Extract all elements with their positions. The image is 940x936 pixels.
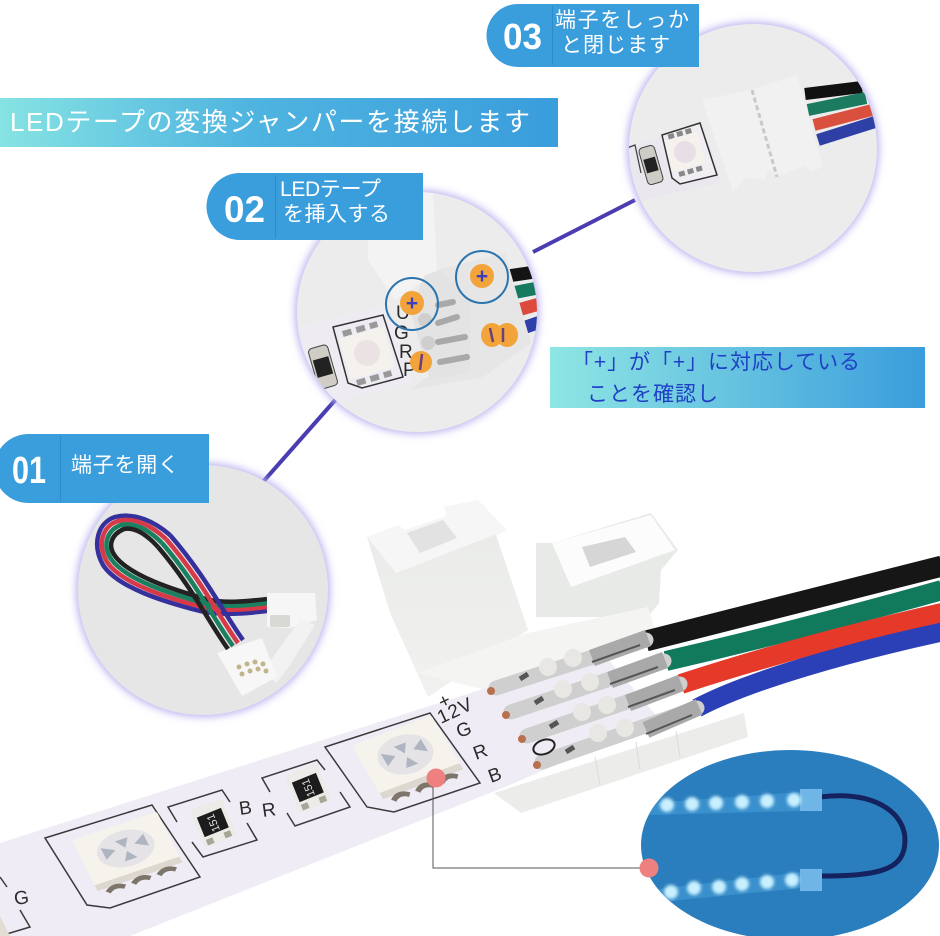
LED chip (351, 716, 466, 804)
clip contacts (438, 302, 467, 362)
LED chip left (72, 812, 185, 895)
photo: LED tape strip (0, 650, 660, 936)
LED outline (333, 315, 403, 388)
photo: lit blue strips ellipse (641, 750, 939, 936)
resistor chips (190, 763, 331, 848)
left partial outline (627, 145, 641, 173)
pad letters: P (403, 360, 416, 381)
pointer dot on LED (426, 768, 446, 788)
connector lower clamp (494, 713, 748, 813)
tape pad labels: 12V (434, 694, 476, 729)
callout: check polarity: 「+」が「+」に対応している (572, 351, 860, 374)
tape pad labels (13, 690, 505, 910)
jumper wire (820, 796, 905, 876)
callout: check polarity (550, 347, 925, 408)
tape pad labels: B (238, 797, 253, 820)
lit strip bottom (658, 872, 800, 901)
step label 02: LEDテープ (280, 178, 381, 201)
pad letters: U (396, 303, 410, 324)
tape pad labels: + (435, 690, 454, 714)
connectors (800, 789, 822, 811)
round pads (539, 649, 634, 742)
resistor (308, 344, 338, 390)
title banner: LEDテープの変換ジャンパーを接続します (10, 107, 530, 137)
lit strip top (650, 792, 802, 815)
tape pad labels: G (13, 887, 30, 910)
pad letters: R (399, 342, 413, 363)
plus marker on tape (386, 278, 438, 330)
plus marker on tape: + (406, 292, 418, 315)
G pad partial LED (0, 916, 10, 936)
connector lines (262, 200, 635, 483)
pad letters: G (394, 323, 409, 344)
step label 03: 端子をしっか (555, 9, 689, 32)
photo: open connector (367, 500, 748, 813)
metal contacts (487, 638, 699, 769)
callout: check polarity: ことを確認し (587, 383, 718, 406)
step label 02: 02 (224, 189, 265, 230)
tape pad labels: G (454, 718, 475, 743)
circle photo: step 01 (76, 463, 330, 717)
footprint outlines (0, 713, 480, 936)
open clip connectors (267, 593, 317, 628)
connector hinge band (417, 607, 655, 690)
resistor (638, 145, 664, 185)
step label 01: 端子を開く (71, 454, 179, 477)
LED outline (662, 123, 717, 184)
closed clip (702, 75, 823, 192)
step label 03: と閉じます (561, 34, 670, 57)
descending strands (158, 535, 243, 649)
LED chip (663, 129, 707, 176)
step label 01: 01 (12, 450, 46, 492)
step label 02: を挿入する (283, 203, 390, 226)
top lights (660, 793, 801, 812)
clip body (508, 269, 528, 334)
circle photo: step 02 (295, 190, 552, 434)
pointer line (433, 785, 642, 868)
pointer dot on ellipse (640, 858, 658, 878)
looped jumper wire (97, 516, 267, 649)
wires: black green red blue (646, 566, 940, 708)
plus marker on clip: + (476, 265, 488, 288)
gold contacts grid (236, 660, 268, 676)
loop and tail strands (97, 516, 267, 614)
pad letters (394, 306, 414, 376)
tape pad labels: R (261, 799, 277, 822)
title banner (0, 98, 558, 147)
circle photo: step 03 (623, 22, 879, 274)
minus marker on tape (410, 351, 432, 373)
tape (298, 332, 330, 394)
tape pad labels: B (486, 764, 505, 788)
tape (623, 122, 722, 202)
step label 02 (206, 173, 423, 240)
copper tips (487, 687, 541, 769)
connector flap right (536, 513, 678, 617)
wires (805, 87, 875, 140)
step label 03 (486, 4, 699, 67)
wires (510, 266, 537, 334)
step label 03: 03 (503, 16, 542, 57)
bottom lights (664, 873, 799, 899)
minus marker on clip (481, 323, 518, 347)
crimps (592, 638, 699, 730)
clip top band (423, 192, 433, 194)
tape pad labels: R (471, 740, 491, 765)
connector flap left (367, 500, 528, 697)
plus marker on clip (456, 251, 508, 303)
LED chip (338, 323, 396, 384)
step label 01 (0, 434, 209, 503)
